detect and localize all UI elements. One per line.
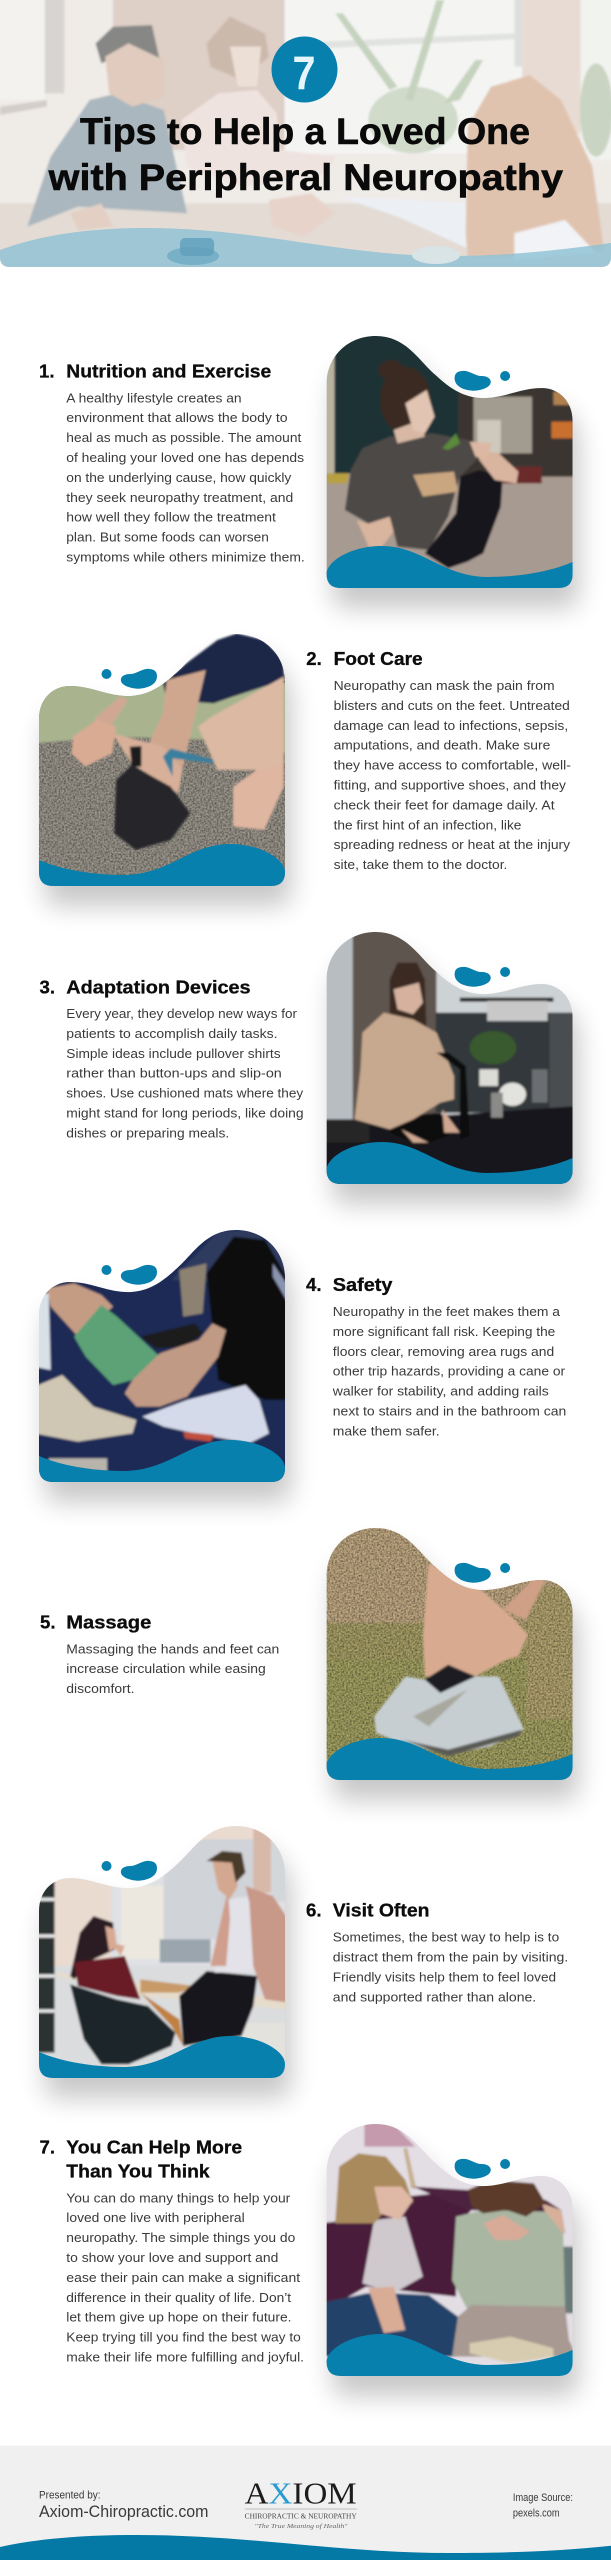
footer wave <box>0 2535 611 2560</box>
heading 5: Massage <box>66 1611 151 1632</box>
heading 7: 7. <box>40 2136 55 2157</box>
body text 3: rather than button-ups and slip-on <box>66 1066 282 1081</box>
panel: tip 6 visit often <box>34 1822 568 2098</box>
body text 5: discomfort. <box>66 1681 134 1696</box>
body text 3: dishes or preparing meals. <box>66 1125 229 1140</box>
heading 2: 2. <box>306 648 322 669</box>
body text 2: Neuropathy can mask the pain from <box>334 678 555 693</box>
body text 3 <box>66 1006 304 1140</box>
droplet 5 <box>455 1563 510 1583</box>
presented by: Axiom-Chiropractic.com <box>39 2503 208 2521</box>
body text 1: on the underlying cause, how quickly <box>66 470 292 485</box>
wave 6 <box>39 2036 285 2078</box>
image card 5: hand on sneaker <box>320 1523 581 1800</box>
body text 2: fitting, and supportive shoes, and they <box>334 778 566 792</box>
body text 4: walker for stability, and adding rails <box>332 1384 549 1399</box>
body text 3: might stand for long periods, like doing <box>66 1106 304 1120</box>
footer panel <box>0 2446 611 2560</box>
body text 2 <box>334 678 571 872</box>
image card 2: foot and shoe <box>34 633 291 906</box>
body text 1: how well they follow the treatment <box>66 510 276 525</box>
body text 3: shoes. Use cushioned mats where they <box>66 1086 304 1101</box>
logo: Axiom chiropractic and neuropathy: AXIOM <box>245 2475 357 2510</box>
heading 7: Than You Think <box>66 2161 210 2182</box>
heading 1: 1. <box>39 360 55 381</box>
body text 6: and supported rather than alone. <box>333 1989 536 2004</box>
wave 3 <box>327 1142 573 1184</box>
body text 2: blisters and cuts on the feet. Untreated <box>334 698 570 713</box>
body text 5 <box>66 1641 279 1696</box>
body text 7: to show your love and support and <box>66 2250 278 2265</box>
body text 7: Keep trying till you find the best way to <box>66 2330 301 2345</box>
image card 1: woman eating <box>320 330 581 608</box>
body text 5: Massaging the hands and feet can <box>66 1641 279 1656</box>
presented by <box>39 2489 208 2521</box>
wave 7 <box>327 2334 573 2376</box>
image source <box>513 2492 573 2519</box>
body text 1: of healing your loved one has depends <box>66 450 304 465</box>
body text 1: they seek neuropathy treatment, and <box>66 490 293 505</box>
wave 1 <box>327 546 573 588</box>
body text 3: Simple ideas include pullover shirts <box>66 1046 281 1061</box>
body text 4: make them safer. <box>333 1423 440 1438</box>
panel: tip 2 foot care <box>34 633 571 906</box>
droplet 4 <box>102 1265 157 1285</box>
heading 7: You Can Help More <box>66 2136 242 2157</box>
heading 4: 4. <box>306 1274 322 1295</box>
image source: pexels.com <box>513 2507 560 2519</box>
body text 1: environment that allows the body to <box>66 410 288 425</box>
image card 4: injured foot <box>34 1226 292 1502</box>
heading 5: 5. <box>40 1611 56 1632</box>
panel: tip 4 safety <box>34 1226 566 1502</box>
heading 6: Visit Often <box>333 1900 430 1921</box>
body text 1: heal as much as possible. The amount <box>66 430 302 445</box>
body text 2: check their feet for damage daily. At <box>334 797 555 812</box>
badge number 7: 7 <box>292 46 316 100</box>
logo: Axiom chiropractic and neuropathy: CHIROPRACTIC & NEUROPATHY <box>245 2512 358 2520</box>
body text 2: the first hint of an infection, like <box>334 817 521 832</box>
panel: tip 7 you can help more than you think <box>40 2120 581 2396</box>
body text 2: spreading redness or heat at the injury <box>334 837 570 852</box>
body text 1: A healthy lifestyle creates an <box>66 390 242 405</box>
body text 7: difference in their quality of life. Don’t <box>66 2290 291 2305</box>
grass colour bands <box>326 1528 572 1780</box>
body text 6: distract them from the pain by visiting. <box>333 1950 568 1965</box>
body text 1: plan. But some foods can worsen <box>66 530 269 545</box>
body text 2: amputations, and death. Make sure <box>334 738 550 753</box>
logo: Axiom chiropractic and neuropathy <box>245 2475 358 2530</box>
body text 6: Friendly visits help them to feel loved <box>333 1970 556 1984</box>
droplet 6 <box>102 1861 157 1881</box>
wave 5 <box>327 1738 573 1780</box>
title: Tips to Help a Loved One <box>80 111 530 152</box>
body text 4: next to stairs and in the bathroom can <box>333 1404 566 1418</box>
body text 7: neuropathy. The simple things you do <box>66 2230 295 2245</box>
header photo wash <box>0 0 611 267</box>
heading 3: Adaptation Devices <box>66 976 251 997</box>
panel: tip 3 adaptation devices <box>40 926 581 1204</box>
body text 5: increase circulation while easing <box>66 1661 266 1676</box>
body text 3: patients to accomplish daily tasks. <box>66 1026 278 1041</box>
ground base <box>34 674 290 894</box>
body text 7: ease their pain can make a significant <box>66 2270 300 2285</box>
body text 4 <box>332 1304 566 1438</box>
droplet 3 <box>455 967 510 987</box>
ground speckle <box>34 674 290 894</box>
wave 4 <box>39 1440 285 1482</box>
body text 3: Every year, they develop new ways for <box>66 1006 298 1021</box>
body text 4: floors clear, removing area rugs and <box>333 1344 554 1359</box>
body text 4: more significant fall risk. Keeping the <box>333 1324 555 1339</box>
wave 2 <box>39 844 285 886</box>
panel: tip 1 nutrition and exercise <box>39 330 581 608</box>
droplet 7 <box>455 2159 510 2179</box>
body text 6: Sometimes, the best way to help is to <box>333 1930 559 1945</box>
droplet 2 <box>102 669 157 689</box>
heading 3: 3. <box>40 976 55 997</box>
image card 3: woman at sink <box>320 926 581 1204</box>
body text 7: loved one live with peripheral <box>66 2210 245 2225</box>
body text 1 <box>66 390 305 564</box>
header panel with faded photo <box>0 0 611 273</box>
body text 1: symptoms while others minimize them. <box>66 550 305 564</box>
panel: tip 5 massage <box>40 1523 581 1800</box>
image card 7: comforting couple <box>320 2120 581 2396</box>
droplet 1 <box>455 371 510 391</box>
body text 7: let them give up hope on their future. <box>66 2310 292 2325</box>
body text 7: make their life more fulfilling and joyful. <box>66 2350 304 2364</box>
header photo <box>0 0 611 273</box>
header wave <box>0 228 611 270</box>
body text 4: Neuropathy in the feet makes them a <box>333 1304 561 1319</box>
image card 6: two people talking <box>34 1822 292 2098</box>
title <box>48 111 563 198</box>
body text 2: site, take them to the doctor. <box>334 857 507 872</box>
title: with Peripheral Neuropathy <box>48 157 563 198</box>
image source: Image Source: <box>513 2492 573 2504</box>
heading 1: Nutrition and Exercise <box>66 360 271 381</box>
heading 6: 6. <box>306 1900 322 1921</box>
logo: Axiom chiropractic and neuropathy: "The True Meaning of Health" <box>254 2523 348 2530</box>
badge number 7 <box>272 36 338 102</box>
heading 4: Safety <box>333 1274 393 1295</box>
grass speckle <box>322 1523 578 1785</box>
body text 7 <box>66 2190 304 2364</box>
body text 4: other trip hazards, providing a cane or <box>333 1364 566 1379</box>
footer background <box>0 2446 611 2560</box>
heading 2: Foot Care <box>334 648 423 669</box>
presented by: Presented by: <box>39 2489 100 2501</box>
body text 6 <box>333 1930 568 2004</box>
body text 2: they have access to comfortable, well- <box>334 758 571 773</box>
body text 2: damage can lead to infections, sepsis, <box>334 718 568 733</box>
body text 7: You can do many things to help your <box>66 2190 291 2205</box>
